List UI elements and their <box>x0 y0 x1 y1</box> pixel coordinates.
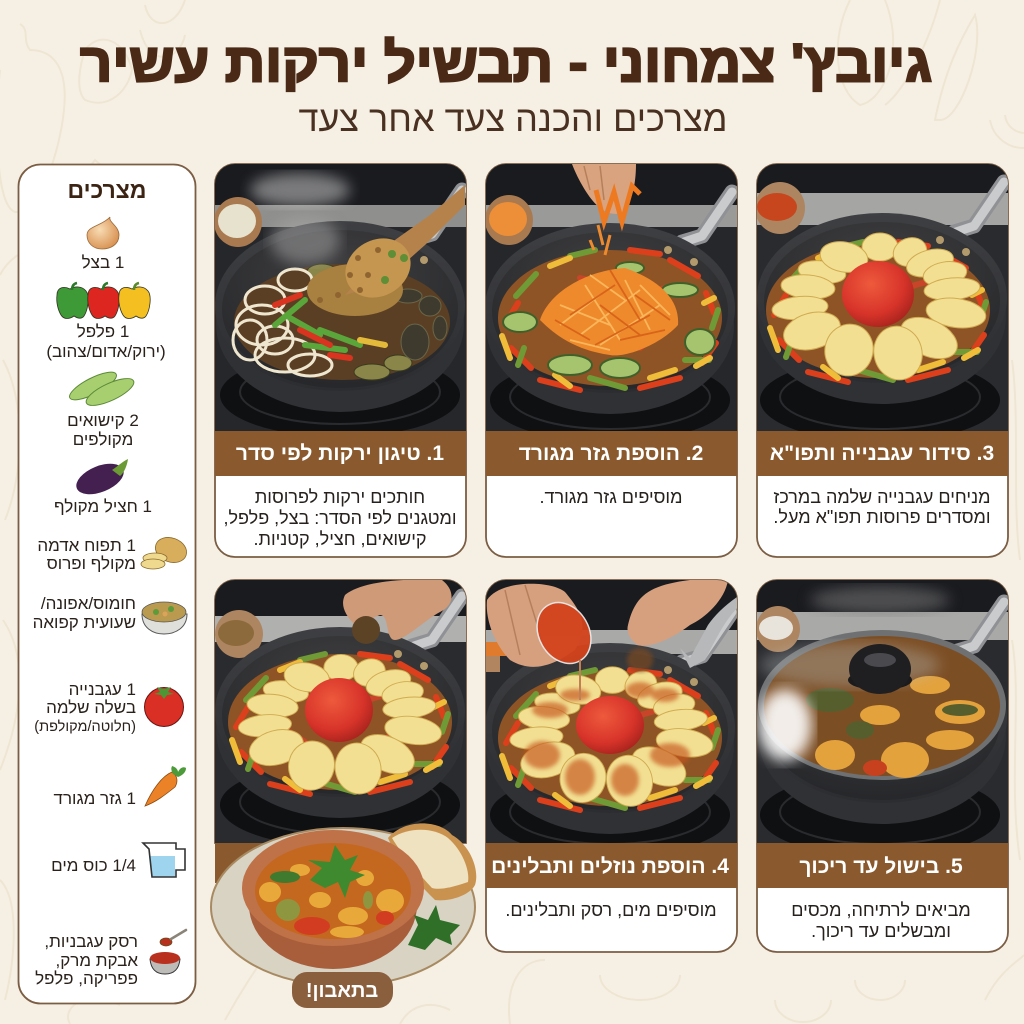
panel: step 1 <box>214 164 466 557</box>
title: גיובץ' צמחוני - תבשיל ירקות עשיר <box>80 33 932 93</box>
panel: step 2 <box>485 164 737 557</box>
icon: eggplant <box>72 458 128 500</box>
pepper label <box>46 322 166 361</box>
zucchini label: מקולפים <box>73 430 133 449</box>
carrot label: 1 גזר מגורד <box>54 789 136 808</box>
step 5 text <box>791 900 971 941</box>
parsley <box>408 905 460 950</box>
step 5 banner: 5. בישול עד ריכוך <box>799 855 963 878</box>
step 5 text: מביאים לרתיחה, מכסים <box>791 900 971 920</box>
subtitle: מצרכים והכנה צעד אחר צעד <box>299 98 727 139</box>
step 4 banner <box>486 843 737 888</box>
potato label: 1 תפוח אדמה <box>37 536 136 555</box>
photo: step 3 tomato and potato arrangement <box>755 164 1008 442</box>
eggplant label: 1 חציל מקולף <box>54 497 152 516</box>
tomato label: (חלוטה/מקולפת) <box>34 718 136 735</box>
step 3 banner: 3. סידור עגבנייה ותפו"א <box>770 442 994 465</box>
step 3 text: מניחים עגבנייה שלמה במרכז <box>774 487 990 507</box>
step 2 banner: 2. הוספת גזר מגורד <box>519 442 703 465</box>
step 4 text: מוסיפים מים, רסק ותבלינים. <box>505 900 717 920</box>
label: enjoy badge: בתאבון! <box>306 980 378 1002</box>
legumes label <box>33 594 136 632</box>
step 1 banner <box>215 431 466 476</box>
photo: step 2 adding grated carrot <box>485 164 737 442</box>
panel: step 4 <box>485 580 740 952</box>
step 2 banner <box>486 431 737 476</box>
panel: step 5 <box>756 580 1008 952</box>
photo: step 1 frying vegetables <box>214 164 466 437</box>
zucchini label: 2 קישואים <box>67 411 139 430</box>
zucchini label <box>67 411 139 449</box>
photo: adding liquids and spices <box>485 580 740 857</box>
icon: peppers <box>57 283 150 318</box>
icon: tomato <box>144 687 184 726</box>
step 2 text: מוסיפים גזר מגורד. <box>540 487 682 507</box>
step 1 text <box>224 487 456 549</box>
spices label: פפריקה, פלפל <box>35 969 138 988</box>
spices label: אבקת מרק, <box>55 951 138 970</box>
water label: 1/4 כוס מים <box>51 856 136 875</box>
panel: ingredients <box>18 164 196 1004</box>
step 4 banner remnant <box>215 843 305 883</box>
step 3 text: ומסדרים פרוסות תפו"א מעל. <box>773 507 991 527</box>
potato label: מקולף ופרוס <box>47 554 136 573</box>
tomato label: 1 עגבנייה <box>69 680 136 699</box>
step 5 text: ומבשלים עד ריכוך. <box>811 921 951 941</box>
spices label: רסק עגבניות, <box>44 932 138 951</box>
pepper label: 1 פלפל <box>77 322 129 341</box>
panel: step 3 <box>755 164 1008 557</box>
icon: measuring cup <box>143 843 185 877</box>
step 1 banner: 1. טיגון ירקות לפי סדר <box>236 442 444 465</box>
step 3 text <box>773 487 991 527</box>
icon: onion <box>87 217 119 249</box>
pepper label: (ירוק/אדום/צהוב) <box>46 342 166 361</box>
legumes label: שעועית קפואה <box>33 613 136 632</box>
step 1 text: ומטגנים לפי הסדר: בצל, פלפל, <box>224 508 456 528</box>
step 1 text: קישואים, חציל, קטניות. <box>254 529 426 549</box>
step 1 text: חותכים ירקות לפרוסות <box>255 487 425 507</box>
panel: step 4 photo with seasoning hand <box>215 580 466 847</box>
step 5 banner <box>757 843 1008 888</box>
spices label <box>35 932 138 988</box>
ingredients heading: מצרכים <box>67 177 147 203</box>
icon: potato <box>141 533 190 569</box>
clay bowl <box>242 830 424 969</box>
icon: spices <box>150 930 186 974</box>
step 4 banner: 4. הוספת נוזלים ותבלינים <box>491 855 729 878</box>
label: enjoy badge <box>292 972 393 1008</box>
legumes label: חומוס/אפונה/ <box>41 594 136 613</box>
onion label: 1 בצל <box>82 253 124 272</box>
tomato label: בשלה שלמה <box>46 698 136 717</box>
photo: simmering under lid <box>756 580 1008 857</box>
bread <box>388 823 476 900</box>
potato label <box>37 536 136 573</box>
icon: zucchini <box>66 367 137 411</box>
icon: legumes bowl <box>142 602 187 634</box>
photo: potatoes in pan, hand sprinkling spice <box>215 580 466 847</box>
serving plate with stew <box>211 823 476 1008</box>
tomato label <box>34 680 136 735</box>
icon: carrot <box>145 766 186 806</box>
step 3 banner <box>757 431 1008 476</box>
